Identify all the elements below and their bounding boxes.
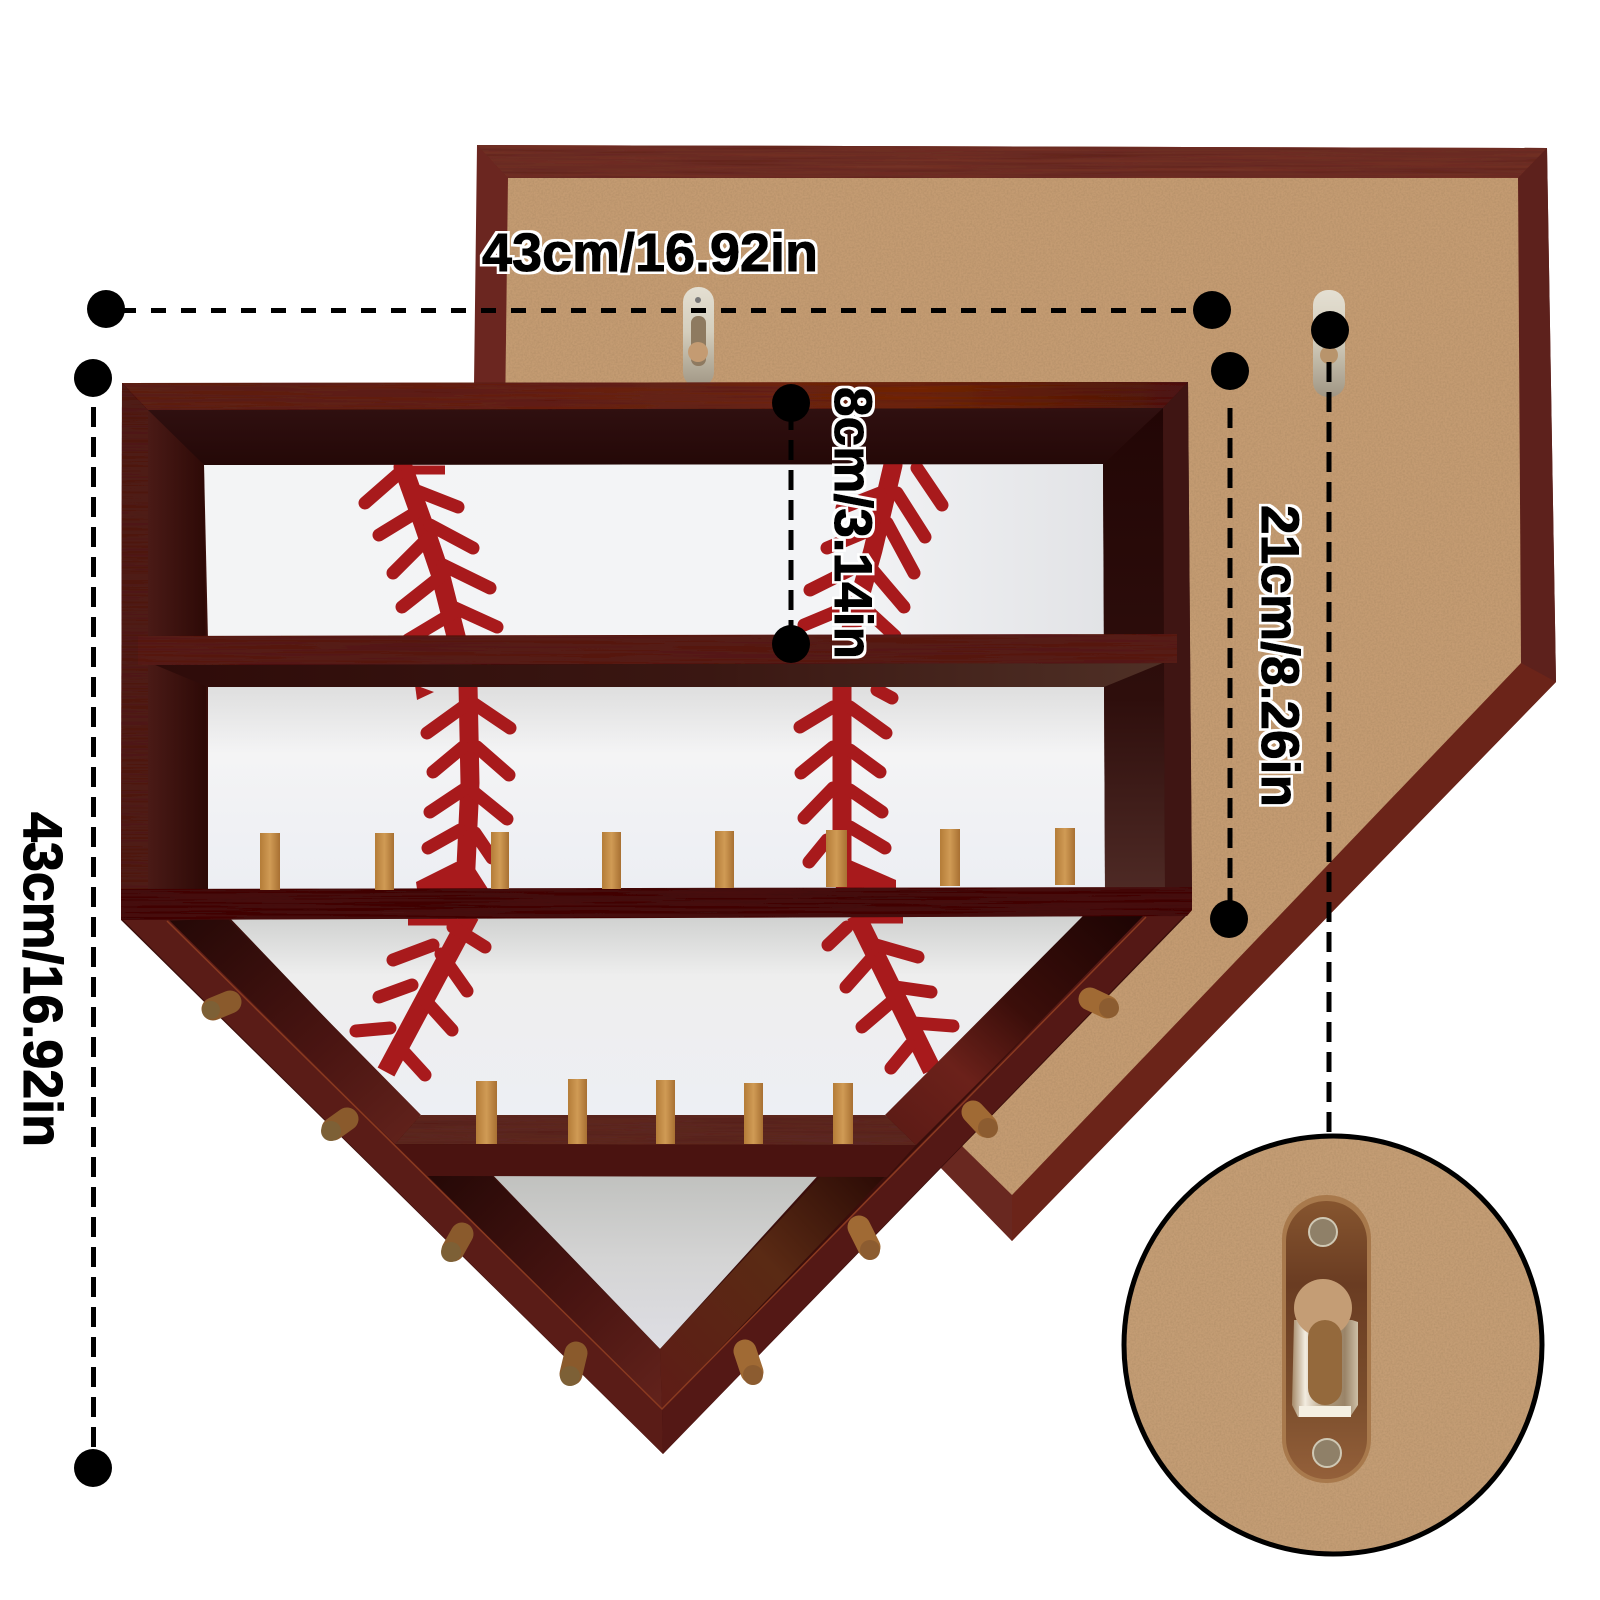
keyhole bbox=[1294, 1279, 1352, 1337]
bracket plate bbox=[1282, 1195, 1371, 1483]
MDF backing board bbox=[505, 178, 1521, 1195]
upright pegs lower row bbox=[476, 1079, 853, 1144]
red stitching: left bbox=[356, 467, 510, 1075]
endpoint top bbox=[772, 384, 810, 422]
dimension: shelf depth bbox=[772, 384, 882, 663]
outer right diagonal face bbox=[662, 913, 1187, 1454]
left inner wall bbox=[148, 410, 208, 892]
white backing lower bbox=[227, 915, 1084, 1118]
label: 43cm/16.92in bbox=[482, 223, 818, 283]
endpoint bottom bbox=[1210, 900, 1248, 938]
endpoint top bbox=[1211, 352, 1249, 390]
lower right inner wall bbox=[885, 915, 1146, 1145]
back frame lower right rail bbox=[1012, 663, 1556, 1241]
line bbox=[121, 308, 1193, 313]
bottom right inner wall bbox=[660, 1174, 887, 1409]
hanging bracket left bbox=[683, 287, 714, 387]
callout disc bbox=[1124, 1136, 1542, 1554]
dimension: bracket spacing height bbox=[1210, 352, 1309, 938]
line bbox=[1326, 362, 1332, 1137]
side pegs left bbox=[202, 1001, 580, 1386]
dimension: horizontal back width bbox=[87, 223, 1231, 329]
top rail bbox=[122, 382, 1188, 410]
hanging bracket right bbox=[1313, 290, 1345, 397]
frame highlight lines bbox=[167, 917, 1146, 1409]
white backing tip bbox=[488, 1170, 823, 1349]
lower left inner wall bbox=[167, 918, 421, 1144]
back frame lower left rail bbox=[941, 1147, 1012, 1241]
endpoint bbox=[1311, 311, 1349, 349]
upper shelf front bbox=[138, 634, 1177, 665]
endpoint left bbox=[87, 290, 125, 328]
lower main shelf front bbox=[121, 887, 1192, 920]
bottom screw bbox=[1313, 1439, 1341, 1467]
bottom left inner wall bbox=[424, 1172, 662, 1409]
upper shelf underside bbox=[148, 662, 1165, 687]
top inner wall bbox=[148, 408, 1163, 465]
label: 21cm/8.26in bbox=[1250, 505, 1309, 807]
side pegs right bbox=[743, 998, 1119, 1385]
frame backing bbox=[121, 382, 1192, 1454]
callout ring bbox=[1124, 1136, 1542, 1554]
line bbox=[788, 410, 794, 630]
endpoint top bbox=[74, 359, 112, 397]
outer left diagonal face bbox=[121, 918, 663, 1454]
top screw bbox=[1309, 1218, 1337, 1246]
label: 43cm/16.92in bbox=[12, 812, 74, 1147]
line bbox=[91, 407, 96, 1452]
back frame top rail bbox=[477, 145, 1547, 178]
line bbox=[1228, 408, 1232, 905]
panel: back of home plate frame bbox=[474, 145, 1556, 1241]
small shelf top surface bbox=[395, 1115, 916, 1145]
right rail bbox=[1163, 382, 1192, 890]
endpoint bottom bbox=[74, 1449, 112, 1487]
back frame wood bbox=[474, 145, 1556, 1241]
upright pegs upper row bbox=[260, 828, 1075, 890]
silver hook insert bbox=[1292, 1320, 1358, 1417]
endpoint bottom bbox=[772, 625, 810, 663]
back frame right rail bbox=[1518, 148, 1556, 682]
white backing middle bbox=[208, 680, 1105, 892]
dimension: overall height bbox=[12, 359, 112, 1487]
panel: front of home plate shelf bbox=[121, 382, 1192, 1454]
small shelf front bbox=[395, 1144, 916, 1177]
left rail bbox=[121, 383, 148, 892]
white backing upper bbox=[204, 464, 1104, 640]
red stitching: right bbox=[800, 465, 953, 1070]
endpoint right bbox=[1193, 291, 1231, 329]
label: 8cm/3.14in bbox=[823, 387, 882, 659]
leader line to callout bbox=[1311, 311, 1349, 1137]
callout: magnified hanging bracket bbox=[1124, 1136, 1542, 1554]
right inner wall bbox=[1103, 408, 1165, 890]
